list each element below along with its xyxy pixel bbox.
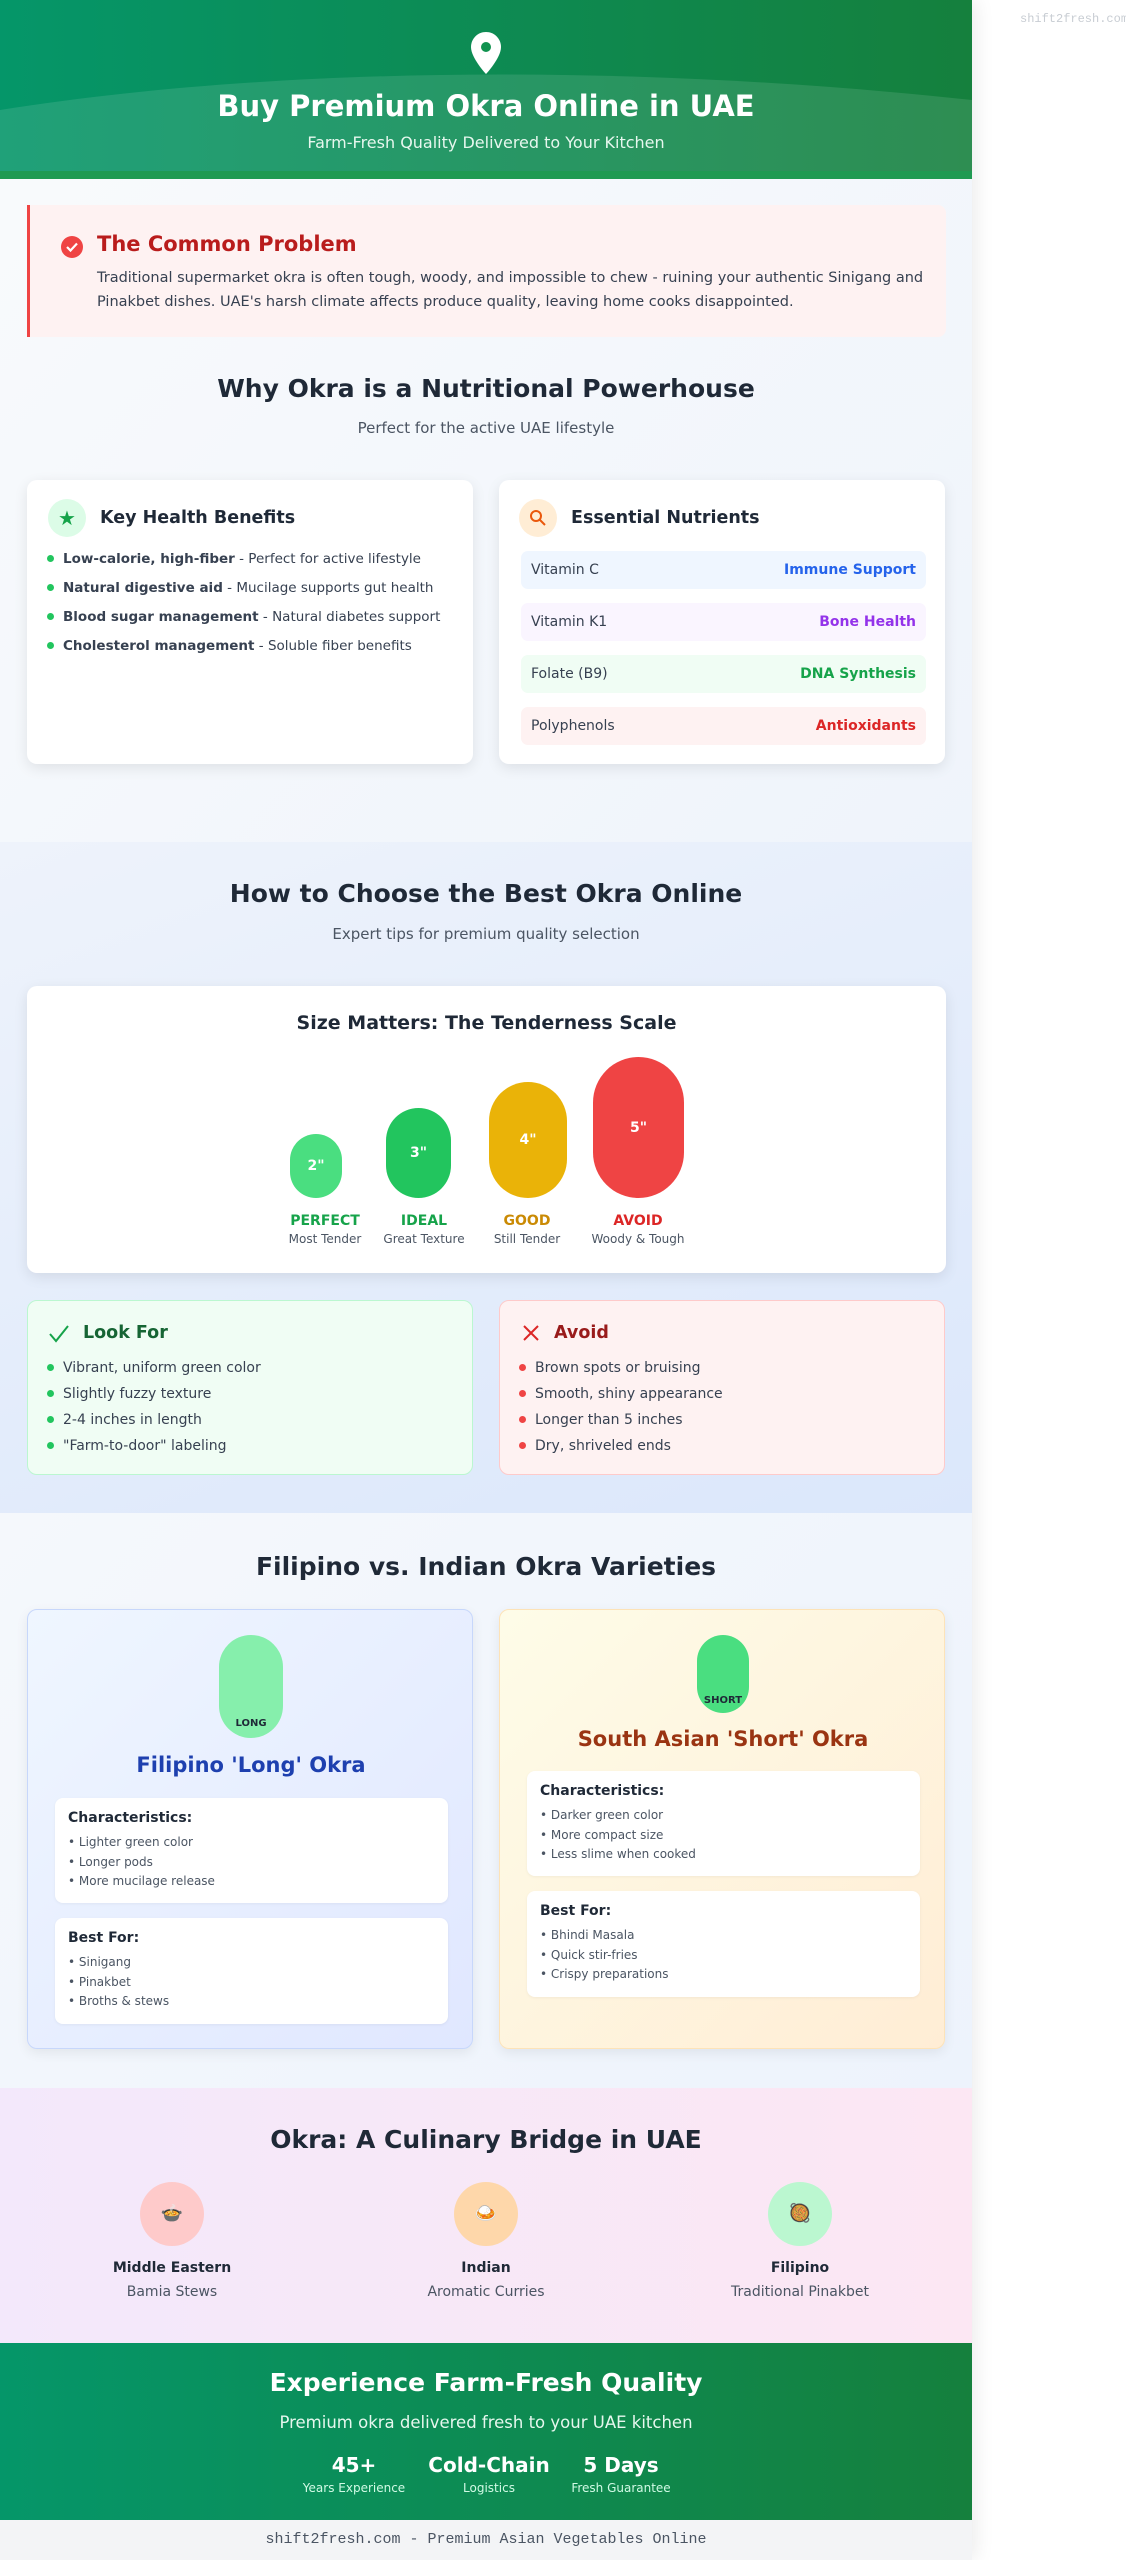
best for box: • Pinakbet <box>68 1975 131 1989</box>
section 4: culinary bridge <box>0 2088 972 2343</box>
nutrient rows: Vitamin C <box>531 562 599 578</box>
best for box: • Crispy preparations <box>540 1967 668 1981</box>
chart: tenderness pills: 3" <box>410 1145 427 1161</box>
panel: filipino long okra <box>27 1609 473 2049</box>
icon: star: ★ <box>58 506 76 530</box>
best for box: • Sinigang <box>68 1955 131 1969</box>
nutrient rows: Antioxidants <box>816 718 916 734</box>
item: filipino: Filipino <box>771 2260 829 2276</box>
panel: tenderness scale <box>27 986 946 1273</box>
cta title: Experience Farm-Fresh Quality <box>270 2368 702 2397</box>
characteristics box: • Less slime when cooked <box>540 1847 696 1861</box>
item: filipino: Traditional Pinakbet <box>731 2284 869 2300</box>
chart: tenderness pills: 2" <box>307 1158 325 1174</box>
characteristics box: Characteristics: <box>540 1783 664 1799</box>
characteristics box: • More compact size <box>540 1828 663 1842</box>
benefits list: Cholesterol management - Soluble fiber benefits <box>63 638 412 654</box>
nutrient rows: Folate (B9) <box>531 666 608 682</box>
characteristics box: • Longer pods <box>68 1855 153 1869</box>
look for list: 2-4 inches in length <box>63 1412 202 1428</box>
avoid list: Brown spots or bruising <box>535 1360 700 1376</box>
watermark: shift2fresh.com <box>1020 12 1126 26</box>
icon: magnifier <box>519 499 557 537</box>
characteristics box: • Darker green color <box>540 1808 663 1822</box>
south asian title: South Asian 'Short' Okra <box>578 1727 868 1751</box>
avoid list <box>519 1360 723 1454</box>
nutrients title: Essential Nutrients <box>571 508 760 528</box>
icon: cross <box>523 1325 539 1341</box>
characteristics box: • Lighter green color <box>68 1835 193 1849</box>
item: indian: Indian <box>461 2260 511 2276</box>
avoid title: Avoid <box>554 1323 609 1343</box>
stats: Years Experience <box>303 2481 405 2495</box>
item: middle eastern: 🍲 <box>161 2203 183 2224</box>
chart: tenderness pills: 4" <box>519 1132 537 1148</box>
benefits title: Key Health Benefits <box>100 508 295 528</box>
filipino title: Filipino 'Long' Okra <box>136 1753 366 1777</box>
nutrient rows: DNA Synthesis <box>800 666 916 682</box>
panel: common problem <box>27 205 946 337</box>
best for box: • Bhindi Masala <box>540 1928 634 1942</box>
subheading: Expert tips for premium quality selection <box>332 925 640 943</box>
avoid list: Dry, shriveled ends <box>535 1438 671 1454</box>
footer CTA <box>0 2343 972 2520</box>
chart: tenderness pills: IDEAL <box>401 1213 447 1229</box>
look for title: Look For <box>83 1323 168 1343</box>
benefits list: Low-calorie, high-fiber - Perfect for active lifestyle <box>63 551 421 567</box>
header <box>0 0 972 179</box>
characteristics box <box>55 1798 448 1903</box>
benefits list <box>47 551 440 654</box>
chart: tenderness pills: GOOD <box>504 1213 550 1229</box>
icon: location pin <box>471 32 501 74</box>
stats: Logistics <box>463 2481 515 2495</box>
nutrient rows <box>521 551 926 745</box>
footer bar <box>0 2520 972 2560</box>
best for box: • Quick stir-fries <box>540 1948 638 1962</box>
panel: essential nutrients <box>499 480 945 764</box>
heading: nutritional powerhouse: Why Okra is a Nutritional Powerhouse <box>217 374 755 403</box>
section 3 background <box>0 1513 972 2088</box>
nutrient rows: Vitamin K1 <box>531 614 607 630</box>
section 2 background <box>0 842 972 1513</box>
best for box: Best For: <box>540 1903 611 1919</box>
problem heading: The Common Problem <box>97 232 357 256</box>
best for box <box>55 1918 448 2024</box>
title: Buy Premium Okra Online in UAE <box>217 89 755 123</box>
icon: long okra pill <box>219 1635 283 1738</box>
problem text: Traditional supermarket okra is often tough, woody, and impossible to chew - ruining your authentic Sinigang and Pinakbet dishes. UAE's harsh climate affects produce quality, leaving home cooks disappointed. <box>97 270 923 310</box>
heading: varieties: Filipino vs. Indian Okra Varieties <box>256 1552 716 1581</box>
subtitle: Farm-Fresh Quality Delivered to Your Kitchen <box>307 133 665 152</box>
icon: long okra pill: LONG <box>235 1718 267 1729</box>
avoid list: Longer than 5 inches <box>535 1412 683 1428</box>
footer bar: shift2fresh.com - Premium Asian Vegetables Online <box>265 2531 707 2548</box>
look for list: Slightly fuzzy texture <box>63 1386 211 1402</box>
panel: avoid <box>499 1300 945 1475</box>
chart: tenderness pills: Still Tender <box>494 1232 560 1246</box>
chart: tenderness pills: AVOID <box>613 1213 663 1229</box>
item: filipino <box>730 2182 869 2300</box>
item: middle eastern: Middle Eastern <box>113 2260 231 2276</box>
item: indian: Aromatic Curries <box>427 2284 545 2300</box>
nutrient rows: Polyphenols <box>531 718 615 734</box>
characteristics box: • More mucilage release <box>68 1874 215 1888</box>
item: filipino: 🥘 <box>789 2203 811 2224</box>
icon: short okra pill <box>697 1635 749 1713</box>
chart: tenderness pills: Woody & Tough <box>591 1232 684 1246</box>
chart: tenderness pills: PERFECT <box>290 1213 360 1229</box>
subheading: Perfect for the active UAE lifestyle <box>358 419 614 437</box>
best for box: Best For: <box>68 1930 139 1946</box>
stats: Fresh Guarantee <box>571 2481 671 2495</box>
section 1 background <box>0 179 972 842</box>
cta subtitle: Premium okra delivered fresh to your UAE kitchen <box>279 2413 693 2432</box>
best for box: • Broths & stews <box>68 1994 169 2008</box>
item: indian: 🍛 <box>475 2203 497 2224</box>
heading: choose best okra: How to Choose the Best Okra Online <box>230 879 742 908</box>
item: middle eastern <box>113 2182 231 2300</box>
characteristics box: Characteristics: <box>68 1810 192 1826</box>
panel: look for <box>27 1300 473 1475</box>
chart: tenderness pills: Most Tender <box>289 1232 361 1246</box>
culinary heading: Okra: A Culinary Bridge in UAE <box>270 2125 702 2154</box>
look for list: "Farm-to-door" labeling <box>63 1438 227 1454</box>
icon: star <box>48 499 86 537</box>
icon: short okra pill: SHORT <box>704 1695 742 1706</box>
scale title: Size Matters: The Tenderness Scale <box>297 1012 676 1034</box>
chart: tenderness pills: 5" <box>630 1120 647 1136</box>
panel: key health benefits <box>27 480 473 764</box>
stats: 45+ <box>332 2453 376 2477</box>
look for list: Vibrant, uniform green color <box>63 1360 261 1376</box>
look for list <box>47 1360 261 1454</box>
icon: check circle <box>61 236 83 258</box>
stats <box>302 2453 671 2495</box>
nutrient rows: Immune Support <box>784 562 916 578</box>
avoid list: Smooth, shiny appearance <box>535 1386 723 1402</box>
item: middle eastern: Bamia Stews <box>127 2284 217 2300</box>
panel: south asian short okra <box>499 1609 945 2049</box>
characteristics box <box>527 1771 920 1876</box>
chart: tenderness pills <box>289 1057 684 1246</box>
benefits list: Natural digestive aid - Mucilage supports gut health <box>63 580 433 596</box>
icon: check <box>49 1325 69 1343</box>
nutrient rows: Bone Health <box>819 614 916 630</box>
stats: Cold-Chain <box>428 2453 550 2477</box>
chart: tenderness pills: Great Texture <box>383 1232 465 1246</box>
item: indian <box>427 2182 545 2300</box>
best for box <box>527 1891 920 1997</box>
benefits list: Blood sugar management - Natural diabetes support <box>63 609 440 625</box>
stats: 5 Days <box>583 2453 659 2477</box>
